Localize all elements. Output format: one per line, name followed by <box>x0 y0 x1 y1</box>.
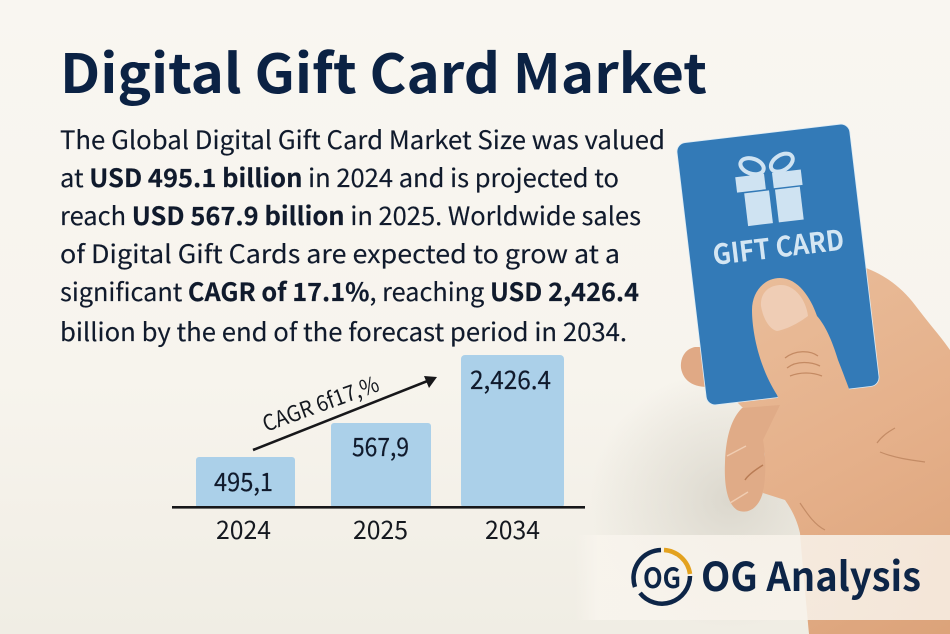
title: Digital Gift Card Market <box>60 30 707 109</box>
hand holding gift card <box>676 123 950 634</box>
hand: thumbnail <box>761 285 808 331</box>
hand: palm <box>735 266 950 634</box>
growth arrow <box>253 376 437 450</box>
hand: lower finger <box>725 405 780 512</box>
bar 2034 <box>461 355 564 508</box>
value labels: 495,1 <box>214 463 273 499</box>
bar 2024 <box>196 457 295 508</box>
description text block: of Digital Gift Cards are expected to grow at a <box>60 235 620 271</box>
logo mark: OG <box>643 557 681 597</box>
description text block: reach USD 567.9 billion in 2025. Worldwide sales <box>60 197 641 233</box>
description text block: The Global Digital Gift Card Market Size was valued <box>60 121 665 157</box>
bar chart <box>172 355 585 547</box>
value labels: 567,9 <box>352 428 409 464</box>
gift card <box>676 123 880 406</box>
year labels: 2034 <box>485 511 540 547</box>
icon: gift box <box>733 149 807 227</box>
bar 2025 <box>331 423 431 508</box>
year labels <box>216 511 540 547</box>
value labels <box>214 361 551 499</box>
logo band <box>575 535 950 620</box>
description text block: significant CAGR of 17.1%, reaching USD 2,426.4 <box>60 273 639 309</box>
card label: GIFT CARD <box>710 219 846 274</box>
logo: OG Analysis <box>634 545 921 604</box>
description text block: at USD 495.1 billion in 2024 and is projected to <box>60 159 619 195</box>
description text block <box>60 121 665 349</box>
hand: upper finger <box>681 347 712 387</box>
value labels: 2,426.4 <box>470 361 551 397</box>
CAGR label: CAGR 6f17,% <box>257 367 383 439</box>
logo wordmark: OG Analysis <box>701 545 921 603</box>
axis line <box>172 506 585 509</box>
logo mark <box>634 550 690 604</box>
year labels: 2024 <box>216 511 271 547</box>
hand: thumb <box>752 278 880 510</box>
description text block: billion by the end of the forecast period in 2034. <box>60 313 627 349</box>
card body <box>676 123 880 406</box>
year labels: 2025 <box>353 511 408 547</box>
